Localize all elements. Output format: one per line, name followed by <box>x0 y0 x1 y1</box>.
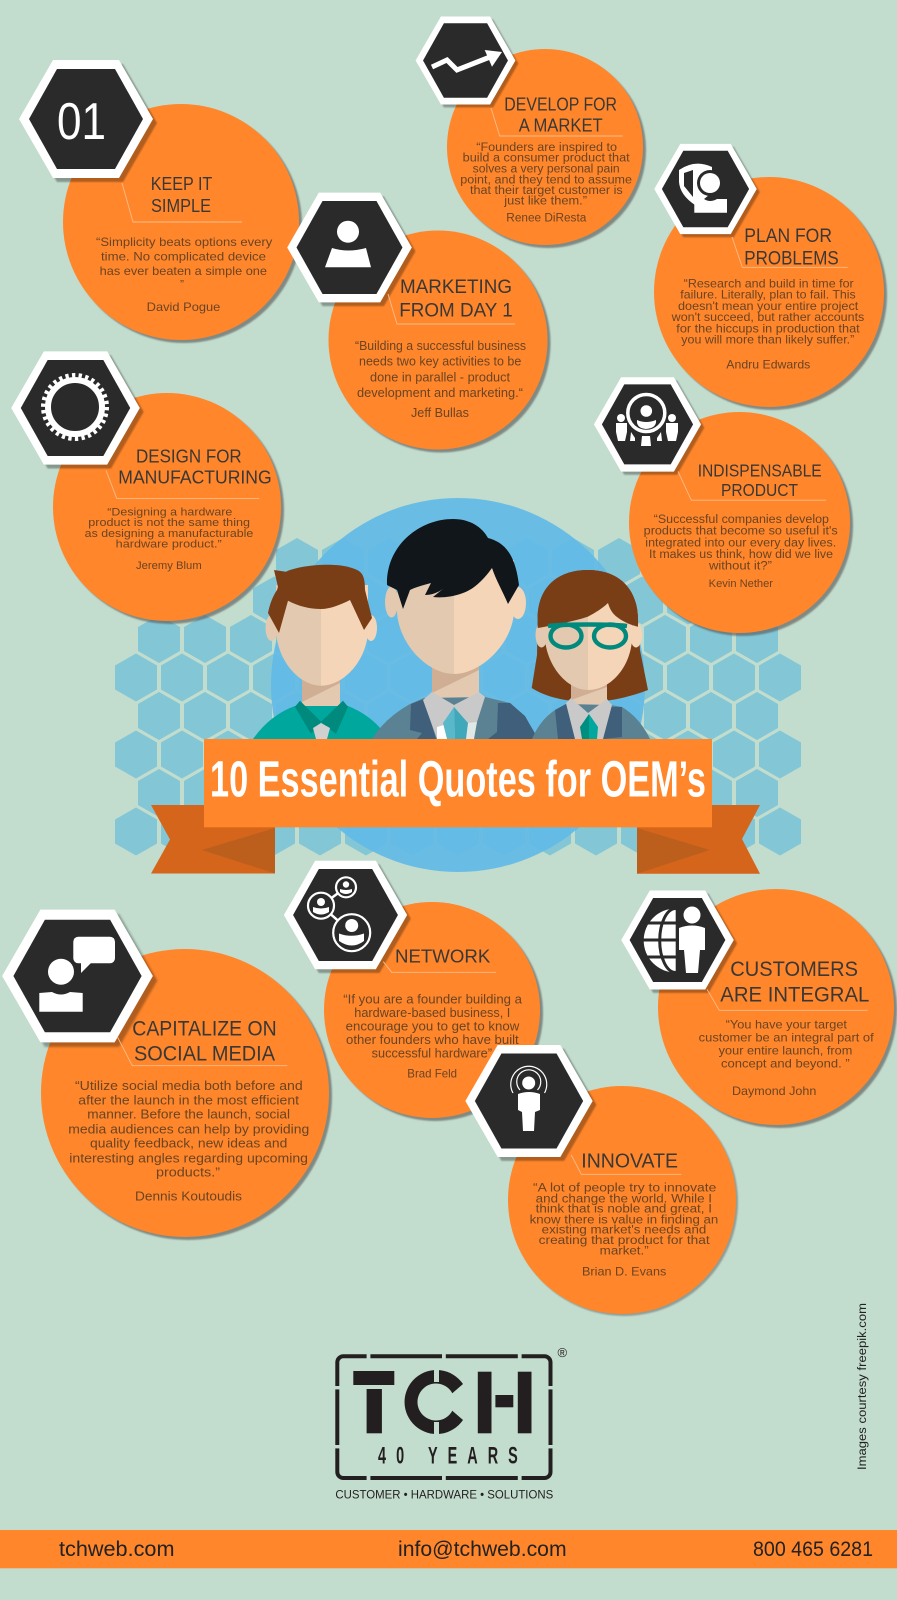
logo: 40 years: 40 YEARS <box>378 1443 518 1469</box>
quote: encourage you to get to know <box>346 1020 520 1034</box>
heading: KEEP IT <box>151 173 212 194</box>
quote: won't succeed, but rather accounts <box>671 310 864 324</box>
icon: globe and person <box>640 906 705 973</box>
quote: hardware product.” <box>116 538 222 550</box>
heading: SIMPLE <box>151 195 211 216</box>
panel: marketing from day 1 <box>287 193 550 452</box>
heading <box>504 95 617 135</box>
quote <box>355 339 526 400</box>
footer: website: tchweb.com <box>59 1538 174 1561</box>
heading rule <box>678 471 826 500</box>
quote: media audiences can help by providing <box>68 1122 309 1136</box>
hexagon badge <box>465 1045 596 1161</box>
attribution: Dennis Koutoudis <box>135 1190 242 1204</box>
quote: “Designing a hardware <box>107 507 232 519</box>
quote: market.” <box>600 1245 649 1257</box>
heading rule <box>106 470 259 498</box>
heading: PROBLEMS <box>744 249 839 270</box>
person: centre man <box>372 519 538 739</box>
attribution: Brian D. Evans <box>582 1264 666 1278</box>
icon: gear <box>44 376 106 438</box>
quote: you will more than likely suffer.” <box>681 332 854 346</box>
quote: and change the world. While I <box>536 1193 712 1205</box>
circle <box>328 230 550 452</box>
quote: existing market's needs and <box>542 1225 706 1237</box>
image credit: Images courtesy freepik.com <box>857 1303 869 1470</box>
hexagon badge <box>284 861 411 973</box>
icon: group of people <box>616 394 678 446</box>
heading rule <box>122 183 242 222</box>
heading: CAPITALIZE ON <box>132 1018 277 1041</box>
title banner with ribbons <box>151 739 760 874</box>
ribbon tail: right <box>637 805 760 874</box>
heading <box>744 226 839 270</box>
heading: PLAN FOR <box>744 226 832 247</box>
heading: INNOVATE <box>581 1150 678 1172</box>
quote: after the launch in the most efficient <box>78 1093 300 1107</box>
panel: customers are integral <box>621 889 897 1128</box>
heading rule <box>707 989 868 1010</box>
hexagon background pattern <box>115 538 801 856</box>
heading: A MARKET <box>519 115 603 135</box>
person: left man <box>253 565 387 739</box>
attribution: Andru Edwards <box>726 358 810 372</box>
hexagon badge <box>287 193 416 306</box>
quote: successful hardware” <box>372 1046 492 1060</box>
icon: shield and person <box>679 164 727 213</box>
icon: person <box>325 221 371 267</box>
quote: point, and they tend to assume <box>460 174 632 186</box>
quote: think that is noble and great, I <box>536 1204 712 1216</box>
panel: capitalize on social media <box>2 910 332 1240</box>
heading: PRODUCT <box>721 480 798 500</box>
quote <box>460 142 632 208</box>
attribution: Daymond John <box>732 1084 816 1098</box>
panel: innovate <box>465 1045 738 1316</box>
hexagon badge <box>11 351 144 468</box>
heading: ARE INTEGRAL <box>720 983 869 1007</box>
heading rule <box>388 294 515 324</box>
quote <box>96 235 272 292</box>
quote: just like them.” <box>503 196 587 208</box>
quote: that their target customer is <box>470 185 623 197</box>
quote: “Research and build in time for <box>684 276 854 290</box>
icon: person with speech bubble <box>39 937 115 1012</box>
quote: “A lot of people try to innovate <box>533 1183 716 1195</box>
panel: develop for a market <box>416 17 646 248</box>
hexagon badge <box>621 890 737 993</box>
quote <box>530 1183 718 1257</box>
heading <box>151 173 212 216</box>
circle <box>63 104 302 343</box>
quote: know there is value in finding an <box>530 1214 718 1226</box>
quote: build a consumer product that <box>463 153 631 165</box>
quote: integrated into our every day lives. <box>645 538 836 550</box>
logo frame <box>333 1352 555 1482</box>
circle <box>654 177 887 410</box>
quote <box>343 993 522 1060</box>
blue circle behind people <box>271 498 645 872</box>
quote: for the hiccups in production that <box>676 321 860 335</box>
person: woman with glasses <box>532 570 650 739</box>
quote: “Successful companies develop <box>654 514 829 526</box>
logo: TCH 40 years <box>333 1345 568 1501</box>
quote: done in parallel - product <box>370 371 511 385</box>
quote: product is not the same thing <box>88 517 250 529</box>
quote: failure. Literally, plan to fail. This <box>680 288 856 302</box>
quote: “If you are a founder building a <box>343 993 522 1007</box>
heading rule <box>571 1155 681 1174</box>
quote: interesting angles regarding upcoming <box>69 1151 308 1165</box>
footer: email: info@tchweb.com <box>398 1538 567 1561</box>
panel: network <box>284 861 543 1121</box>
quote: needs two key activities to be <box>359 355 521 369</box>
quote: products that become so useful it's <box>644 526 838 538</box>
illustration: three people <box>253 519 650 739</box>
number 01: 01 <box>57 93 106 151</box>
icon: person with signal rings <box>511 1066 547 1131</box>
quote: customer be an integral part of <box>699 1031 874 1045</box>
icon: connected people <box>308 877 370 951</box>
heading <box>720 957 869 1007</box>
quote: “Founders are inspired to <box>476 142 617 154</box>
registered mark: ® <box>558 1345 568 1360</box>
heading rule <box>383 962 496 972</box>
quote: “Simplicity beats options every <box>96 235 272 249</box>
attribution: Brad Feld <box>407 1067 457 1081</box>
heading rule <box>491 108 623 136</box>
hexagon badge <box>416 17 518 107</box>
footer: phone: 800 465 6281 <box>753 1538 873 1561</box>
quote: “Utilize social media both before and <box>75 1079 303 1093</box>
hexagon badge <box>2 910 157 1047</box>
quote: manner. Before the launch, social <box>87 1108 290 1122</box>
circle <box>447 49 646 248</box>
quote: development and marketing.“ <box>357 386 523 400</box>
hexagon badge <box>594 377 704 475</box>
panel: indispensable product <box>594 377 853 636</box>
ribbon tail: left <box>151 805 275 874</box>
panel: design for manufacturing <box>11 351 284 624</box>
quote <box>85 507 253 550</box>
quote: “Building a successful business <box>355 339 526 353</box>
quote: your entire launch, from <box>719 1044 852 1058</box>
circle <box>324 902 543 1121</box>
icon: rising arrow <box>432 50 502 70</box>
heading: DESIGN FOR <box>136 445 242 466</box>
circle <box>508 1086 738 1316</box>
logo tagline: CUSTOMER • HARDWARE • SOLUTIONS <box>335 1488 553 1501</box>
quote: concept and beyond. ” <box>721 1056 850 1070</box>
heading rule <box>117 1037 287 1066</box>
panel: keep it simple <box>19 60 302 343</box>
quote <box>644 514 838 572</box>
circle <box>53 393 284 624</box>
quote <box>699 1018 874 1070</box>
heading: CUSTOMERS <box>730 957 858 981</box>
quote: time. No complicated device <box>101 249 266 263</box>
heading: SOCIAL MEDIA <box>134 1042 275 1065</box>
heading: NETWORK <box>395 945 491 966</box>
quote: hardware-based business, I <box>354 1006 510 1020</box>
quote: quality feedback, new ideas and <box>90 1137 287 1151</box>
hexagon badge <box>19 60 157 182</box>
quote: doesn't mean your entire project <box>678 299 859 313</box>
heading: MANUFACTURING <box>118 467 272 488</box>
attribution: Jeff Bullas <box>411 406 469 420</box>
quote: It makes us think, how did we live <box>649 549 833 561</box>
quote: has ever beaten a simple one <box>100 264 267 278</box>
quote: creating that product for that <box>539 1235 711 1247</box>
footer bar <box>0 1530 897 1568</box>
hexagon badge <box>654 144 760 237</box>
logo letters TCH <box>353 1366 532 1438</box>
heading <box>698 460 822 500</box>
heading <box>399 276 513 322</box>
attribution: Kevin Nether <box>709 578 773 590</box>
heading: MARKETING <box>400 276 512 298</box>
heading <box>118 445 272 488</box>
quote: products.” <box>156 1166 220 1180</box>
circle <box>41 949 332 1240</box>
quote: other founders who have built <box>346 1033 519 1047</box>
quote: solves a very personal pain <box>473 164 620 176</box>
quote: “You have your target <box>726 1018 848 1032</box>
attribution: David Pogue <box>147 300 221 314</box>
heading rule <box>732 237 848 267</box>
heading <box>132 1018 277 1065</box>
panel: plan for problems <box>654 144 887 410</box>
quote: without it?” <box>708 560 772 572</box>
attribution: Renee DiResta <box>506 212 587 224</box>
quote: as designing a manufacturable <box>85 528 253 540</box>
quote <box>671 276 864 346</box>
circle <box>629 412 853 636</box>
heading: FROM DAY 1 <box>399 300 513 322</box>
attribution: Jeremy Blum <box>136 560 202 572</box>
heading: DEVELOP FOR <box>504 95 617 115</box>
heading: INDISPENSABLE <box>698 460 822 480</box>
quote <box>68 1079 309 1180</box>
circle <box>658 889 897 1128</box>
quote: ” <box>180 278 184 292</box>
